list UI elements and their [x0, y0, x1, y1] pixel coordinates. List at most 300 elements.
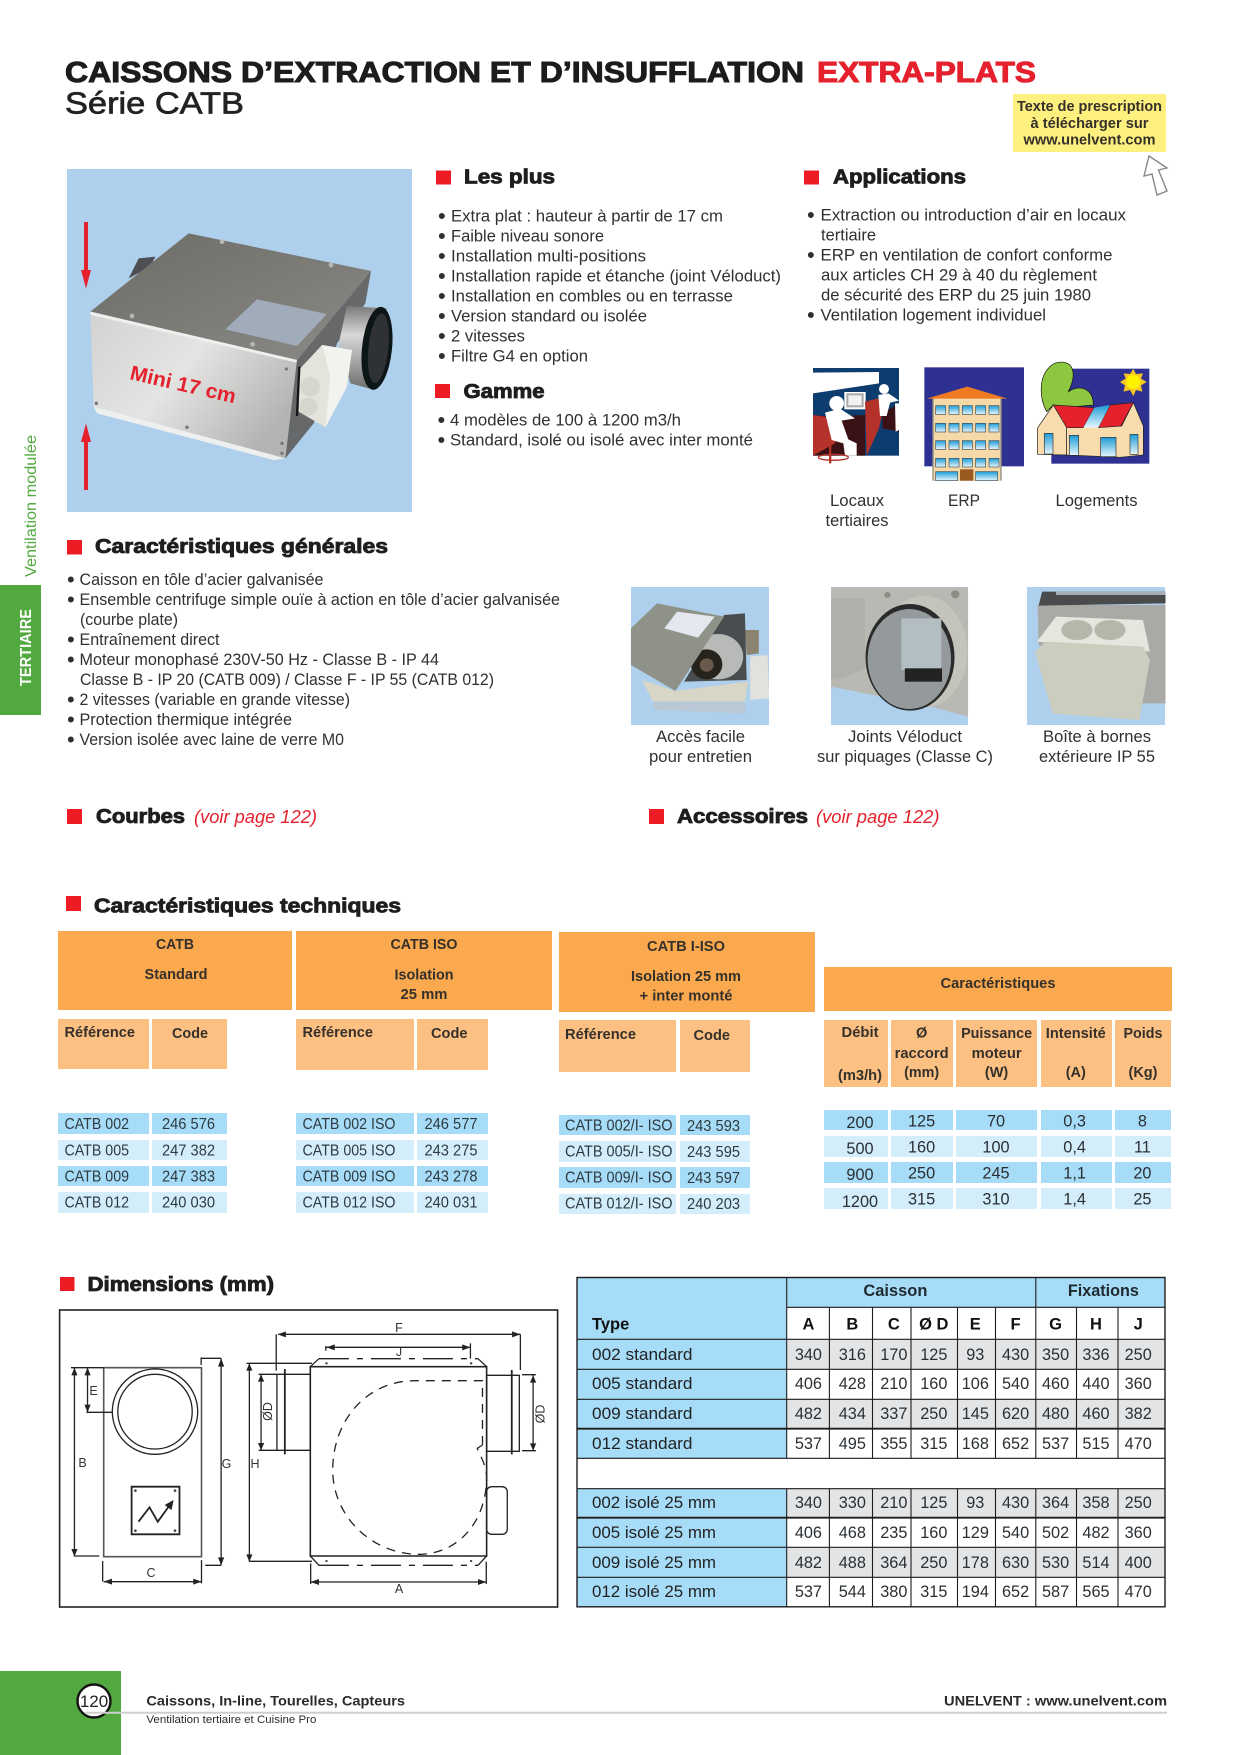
green tab [0, 1671, 121, 1755]
list [438, 203, 781, 368]
footer [0, 1671, 1167, 1755]
arrow: top height [81, 222, 91, 288]
list: • [438, 343, 446, 368]
values: 93 [966, 1494, 984, 1512]
values: 168 [962, 1435, 989, 1453]
values: 340 [795, 1494, 822, 1512]
product: front face [90, 312, 297, 458]
side label: Ventilation modulée [23, 435, 40, 577]
values: 430 [1002, 1346, 1029, 1364]
row labels: 005 standard [592, 1375, 692, 1393]
values: 129 [962, 1524, 989, 1542]
icon: logements [1037, 362, 1149, 464]
header: CATB ISO [390, 937, 458, 953]
header: 25 mm [400, 987, 448, 1003]
row labels: 012 isolé 25 mm [592, 1583, 716, 1601]
list: • [438, 323, 446, 348]
row labels: 002 standard [592, 1346, 692, 1364]
column headers: F [1011, 1316, 1021, 1334]
list: • [67, 687, 75, 712]
values: 514 [1082, 1554, 1110, 1572]
rows: 243 593 [687, 1118, 740, 1135]
list: • [438, 427, 445, 452]
list [67, 567, 560, 752]
list: 4 modèles de 100 à 1200 m3/h [450, 410, 681, 429]
sub header: (m3/h) [838, 1068, 882, 1084]
values: 235 [880, 1524, 907, 1542]
heading [436, 166, 555, 188]
sub header: raccord [895, 1046, 949, 1062]
list: • [438, 263, 446, 288]
sub header: Ø [916, 1026, 927, 1042]
sub header: Intensité [1046, 1026, 1106, 1042]
sub header [559, 1020, 750, 1072]
product: rivets [130, 239, 333, 347]
list: Installation en combles ou en terrasse [451, 286, 733, 305]
values: 364 [1042, 1494, 1069, 1512]
rows: 243 278 [424, 1168, 478, 1186]
values: 482 [1082, 1524, 1110, 1542]
footer left text: Ventilation tertiaire et Cuisine Pro [146, 1714, 316, 1726]
list: Extraction ou introduction d’air en locaux [820, 205, 1127, 224]
rows: CATB 012 [64, 1194, 129, 1212]
sub header: Code [694, 1028, 730, 1044]
values: 355 [880, 1435, 907, 1453]
icon: ERP building [924, 367, 1024, 481]
column headers: G [1049, 1316, 1062, 1334]
rows: 125 [908, 1113, 935, 1131]
values: 380 [880, 1583, 907, 1601]
rows: 900 [846, 1166, 874, 1184]
row labels: 002 isolé 25 mm [592, 1494, 716, 1512]
values: 340 [795, 1346, 822, 1364]
sub header [824, 1020, 1171, 1087]
list: • [67, 567, 75, 592]
sub header [296, 1019, 488, 1070]
rows: CATB 009 ISO [302, 1168, 396, 1186]
values: 350 [1042, 1346, 1069, 1364]
heading: accessoires: Accessoires [677, 806, 808, 828]
rows: CATB 012/I- ISO [565, 1196, 672, 1212]
values: 482 [795, 1405, 822, 1423]
rows: 315 [908, 1191, 935, 1209]
list: (courbe plate) [80, 610, 178, 629]
values: 495 [839, 1435, 866, 1453]
dimension labels: C [146, 1566, 156, 1580]
table: CATB ISO [296, 931, 552, 1213]
sub header: Débit [842, 1025, 879, 1041]
values: 315 [920, 1583, 947, 1601]
values: 406 [795, 1524, 822, 1542]
dimension labels: A [395, 1582, 404, 1596]
values: 630 [1002, 1554, 1029, 1572]
row labels: 009 standard [592, 1405, 692, 1423]
dimension labels: F [395, 1321, 403, 1335]
sub header: Code [431, 1026, 468, 1042]
values: 587 [1042, 1583, 1069, 1601]
values: 530 [1042, 1554, 1069, 1572]
rows: 8 [1138, 1113, 1147, 1131]
list: • [67, 727, 75, 752]
header: Caractéristiques [940, 976, 1056, 992]
column headers: A [802, 1316, 814, 1334]
rows: 240 030 [162, 1194, 215, 1212]
rows: CATB 009/I- ISO [565, 1170, 672, 1186]
sub header: (W) [985, 1065, 1008, 1081]
heading: accessoires: (voir page 122) [816, 807, 940, 827]
list: • [67, 707, 75, 732]
list: • [438, 243, 446, 268]
dimension labels: E [89, 1384, 98, 1398]
values: 515 [1082, 1435, 1110, 1453]
header [559, 932, 815, 1012]
dimension labels: H [250, 1457, 260, 1471]
header: Isolation [394, 968, 454, 984]
icon: locaux tertiaires [813, 368, 899, 463]
list: ERP en ventilation de confort conforme [820, 245, 1112, 264]
list: Extra plat : hauteur à partir de 17 cm [451, 206, 723, 225]
rows: CATB 002/I- ISO [565, 1118, 672, 1134]
rows: 0,4 [1063, 1139, 1086, 1157]
rows: CATB 012 ISO [302, 1194, 396, 1212]
heading: Caractéristiques générales [95, 536, 388, 558]
rows: CATB 005 [64, 1142, 129, 1160]
rows: 245 [982, 1165, 1010, 1183]
values: 106 [962, 1375, 989, 1393]
rows: CATB 002 ISO [302, 1116, 396, 1133]
photo: accès facile [631, 587, 769, 766]
caption [817, 727, 993, 766]
list [438, 407, 753, 452]
values: 434 [839, 1405, 866, 1423]
values: 170 [880, 1346, 907, 1364]
rows: 310 [982, 1191, 1010, 1209]
values: 250 [920, 1405, 947, 1423]
values: 93 [966, 1346, 984, 1364]
values: 488 [839, 1554, 866, 1572]
values: 400 [1125, 1554, 1152, 1572]
heading: Applications [833, 166, 966, 188]
list: 2 vitesses [451, 326, 525, 345]
table: caractéristiques [824, 967, 1172, 1211]
panel: dimension drawing [60, 1310, 558, 1607]
header [824, 967, 1172, 1011]
list: Version standard ou isolée [451, 306, 647, 325]
rows: CATB 002 [64, 1116, 129, 1133]
panel: gamme [435, 381, 753, 452]
values: 330 [839, 1494, 866, 1512]
header: Isolation 25 mm [631, 969, 741, 985]
values: 406 [795, 1375, 822, 1393]
side tab: tertiaire [0, 585, 41, 715]
panel: caractéristiques générales [67, 536, 560, 752]
side view [277, 1359, 519, 1565]
list: Classe B - IP 20 (CATB 009) / Classe F - IP 55 (CATB 012) [80, 670, 494, 689]
sub header: Poids [1124, 1026, 1162, 1042]
caption: ERP: ERP [948, 491, 980, 510]
column headers: Type [592, 1316, 629, 1334]
header: Standard [144, 967, 208, 983]
column headers: H [1090, 1316, 1102, 1334]
rows: 70 [987, 1113, 1005, 1131]
caption: locaux: tertiaires [826, 511, 888, 530]
rows: 243 595 [687, 1144, 740, 1161]
values: 210 [880, 1494, 907, 1512]
header: CATB [156, 937, 194, 953]
header [58, 931, 292, 1010]
grid [577, 1278, 1165, 1607]
list: Protection thermique intégrée [80, 710, 292, 729]
list: tertiaire [821, 225, 876, 244]
list: de sécurité des ERP du 25 juin 1980 [821, 285, 1091, 304]
rows: 200 [846, 1114, 874, 1132]
list: • [438, 203, 446, 228]
rows: CATB 009 [64, 1168, 129, 1186]
column headers: B [846, 1316, 858, 1334]
dimension labels: ØD [261, 1402, 275, 1421]
values: 194 [962, 1583, 989, 1601]
heading: accessoires [649, 806, 940, 828]
values: 160 [920, 1375, 947, 1393]
rows: 246 576 [162, 1116, 215, 1133]
values: 125 [920, 1346, 947, 1364]
values: 537 [1042, 1435, 1069, 1453]
values: 364 [880, 1554, 907, 1572]
dimension labels [78, 1321, 548, 1596]
sub header: (Kg) [1128, 1065, 1158, 1081]
product: junction box [299, 345, 352, 427]
values: 125 [920, 1494, 947, 1512]
dimension labels: J [396, 1345, 402, 1359]
product: label plate [225, 299, 327, 346]
table: CATB I-ISO [559, 932, 815, 1214]
row labels: 005 isolé 25 mm [592, 1524, 716, 1542]
column headers: Ø D [919, 1316, 949, 1334]
rows [58, 1113, 227, 1213]
list: Filtre G4 en option [451, 346, 588, 365]
list: Moteur monophasé 230V-50 Hz - Classe B - IP 44 [80, 650, 439, 669]
values: 537 [795, 1583, 822, 1601]
sub header: Référence [302, 1025, 373, 1041]
panel: les plus [436, 166, 781, 368]
values: 360 [1125, 1375, 1152, 1393]
rows [559, 1115, 750, 1214]
icon: cursor arrow [1144, 156, 1167, 195]
caption: sur piquages (Classe C) [817, 747, 993, 766]
table: dimensions [577, 1278, 1165, 1607]
values: 544 [839, 1583, 866, 1601]
list: Version isolée avec laine de verre M0 [80, 730, 344, 749]
column headers: C [888, 1316, 900, 1334]
header: + inter monté [640, 988, 732, 1004]
values: 540 [1002, 1375, 1029, 1393]
product: round duct [339, 306, 387, 388]
heading: courbes: Courbes [96, 806, 185, 828]
list: • [67, 647, 75, 672]
list: • [67, 627, 75, 652]
values: 470 [1125, 1583, 1152, 1601]
product: rear duct [129, 257, 155, 278]
footer left text [146, 1694, 405, 1726]
column headers: Caisson [863, 1282, 927, 1300]
photo: joints véloduct [817, 587, 993, 766]
list: Entraînement direct [80, 630, 220, 649]
heading: courbes [67, 806, 317, 828]
rows: 247 382 [162, 1142, 215, 1160]
values: 565 [1082, 1583, 1110, 1601]
values [795, 1346, 1152, 1601]
caption: locaux [826, 491, 888, 530]
heading: dimensions: Dimensions (mm) [88, 1274, 274, 1296]
values: 250 [920, 1554, 947, 1572]
values: 502 [1042, 1524, 1069, 1542]
rows: CATB 005 ISO [302, 1142, 396, 1160]
values: 178 [962, 1554, 989, 1572]
list: Caisson en tôle d’acier galvanisée [80, 570, 324, 589]
list: • [807, 242, 815, 267]
rows: 100 [982, 1139, 1010, 1157]
values: 440 [1082, 1375, 1110, 1393]
callout: prescription text [1013, 94, 1166, 152]
rows: 25 [1133, 1191, 1151, 1209]
arrow: bottom height [81, 424, 91, 490]
values: 316 [839, 1346, 866, 1364]
values: 337 [880, 1405, 907, 1423]
callout: prescription text: Texte de prescription [1017, 99, 1162, 115]
rows: 247 383 [162, 1168, 215, 1186]
heading: courbes: (voir page 122) [194, 807, 317, 827]
list: • [67, 587, 75, 612]
caption: Joints Véloduct [848, 727, 962, 746]
values: 480 [1042, 1405, 1069, 1423]
rows: 240 203 [687, 1196, 740, 1213]
dimension labels: ØD [534, 1405, 548, 1423]
dimension labels: B [78, 1456, 87, 1470]
table background [577, 1278, 1165, 1607]
list: Standard, isolé ou isolé avec inter monté [450, 430, 753, 449]
rows: 11 [1134, 1139, 1151, 1157]
sub header: Référence [64, 1025, 135, 1041]
callout: prescription text: à télécharger sur [1030, 116, 1149, 132]
title [65, 57, 1036, 89]
sub header: moteur [972, 1046, 1022, 1062]
heading: caractéristiques techniques: Caractéristiques techniques [94, 896, 401, 918]
values: 360 [1125, 1524, 1152, 1542]
caption: extérieure IP 55 [1039, 747, 1155, 766]
sub header: Puissance [961, 1026, 1032, 1042]
rows: 240 031 [424, 1194, 478, 1212]
heading: Les plus [464, 166, 555, 188]
table: CATB standard [58, 931, 292, 1213]
caption [649, 727, 752, 766]
rows: 243 597 [687, 1170, 740, 1187]
list: • [807, 302, 815, 327]
header: CATB I-ISO [647, 939, 725, 955]
front view [104, 1368, 202, 1557]
rows [824, 1110, 1171, 1211]
caption: Boîte à bornes [1043, 727, 1151, 746]
values: 460 [1042, 1375, 1069, 1393]
sub header: Code [172, 1026, 208, 1042]
list: • [438, 407, 445, 432]
values: 540 [1002, 1524, 1029, 1542]
page number [78, 1684, 110, 1718]
rows: 1,1 [1063, 1165, 1086, 1183]
product: side face [285, 271, 371, 458]
values: 460 [1082, 1405, 1110, 1423]
values: 250 [1125, 1494, 1152, 1512]
list: • [438, 223, 446, 248]
header [296, 931, 552, 1010]
column headers: Fixations [1068, 1282, 1139, 1300]
panel: applications [804, 166, 1149, 530]
title: CAISSONS D’EXTRACTION ET D’INSUFFLATION [65, 57, 804, 89]
list: Faible niveau sonore [451, 226, 604, 245]
sub header [58, 1019, 227, 1069]
values: 482 [795, 1554, 822, 1572]
values: 210 [880, 1375, 907, 1393]
rows: 246 577 [424, 1116, 478, 1133]
values: 250 [1125, 1346, 1152, 1364]
values: 382 [1125, 1405, 1152, 1423]
page number: 120 [80, 1692, 108, 1711]
row labels: 012 standard [592, 1435, 692, 1453]
values: 620 [1002, 1405, 1029, 1423]
rows: 1200 [842, 1193, 878, 1211]
list: • [438, 283, 446, 308]
values: 470 [1125, 1435, 1152, 1453]
rows: 20 [1133, 1165, 1151, 1183]
panel: product photo [67, 169, 412, 512]
callout: prescription text: www.unelvent.com [1022, 132, 1156, 148]
caption [1039, 727, 1155, 766]
product label: Mini 17 cm [128, 361, 238, 408]
dimension lines [71, 1331, 536, 1585]
photo: boîte à bornes [1027, 587, 1166, 766]
values: 652 [1002, 1435, 1029, 1453]
rows: 500 [846, 1140, 874, 1158]
column headers: E [970, 1316, 981, 1334]
subtitle: Série CATB [65, 86, 244, 120]
side tab: tertiaire: TERTIAIRE [18, 609, 35, 686]
title: EXTRA-PLATS [817, 57, 1036, 89]
values: 160 [920, 1524, 947, 1542]
column headers [592, 1282, 1143, 1334]
list: • [807, 202, 815, 227]
list: Installation multi-positions [451, 246, 646, 265]
caption: Accès facile [656, 727, 745, 746]
list: Installation rapide et étanche (joint Véloduct) [451, 266, 781, 285]
sub header: Référence [565, 1027, 636, 1043]
caption: logements: Logements [1056, 491, 1138, 510]
footer right text: UNELVENT : www.unelvent.com [944, 1694, 1167, 1709]
caption: pour entretien [649, 747, 752, 766]
heading: Gamme [464, 381, 544, 403]
list [807, 202, 1127, 327]
rows: 160 [908, 1139, 935, 1157]
rows: 0,3 [1063, 1113, 1086, 1131]
footer left text: Caissons, In-line, Tourelles, Capteurs [146, 1694, 405, 1709]
sub header: (mm) [904, 1065, 939, 1081]
row labels [592, 1346, 716, 1601]
rows: CATB 005/I- ISO [565, 1144, 672, 1160]
values: 430 [1002, 1494, 1029, 1512]
list: aux articles CH 29 à 40 du règlement [821, 265, 1097, 284]
values: 145 [962, 1405, 989, 1423]
rows: 1,4 [1063, 1191, 1086, 1209]
values: 428 [839, 1375, 866, 1393]
list: • [438, 303, 446, 328]
